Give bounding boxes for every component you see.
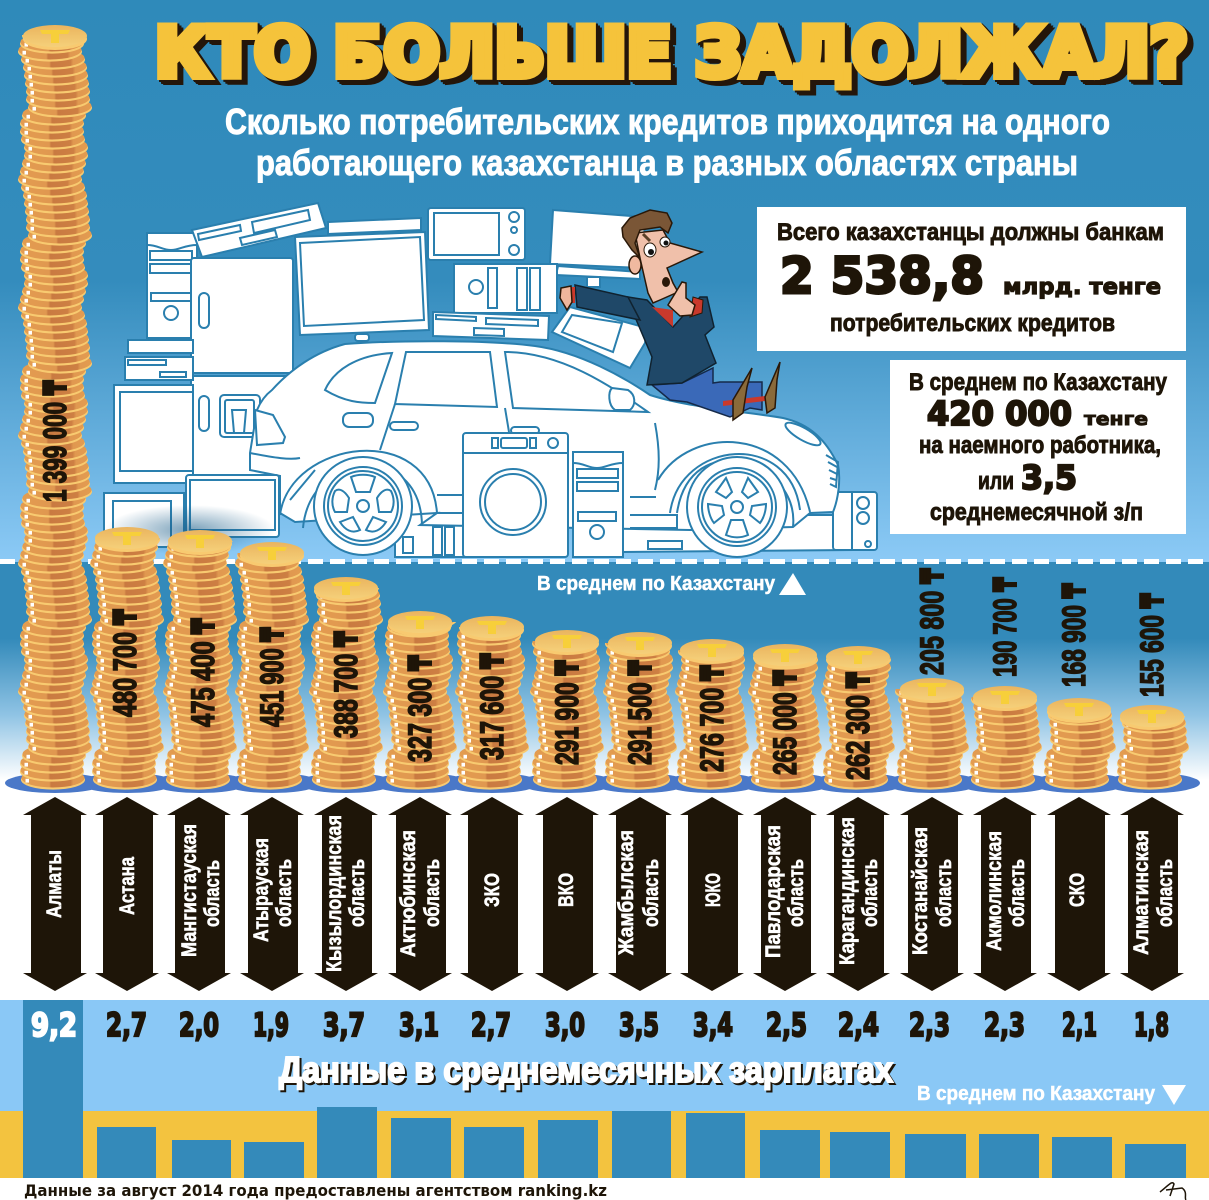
appliance: monitor bottom left [104,493,184,547]
car windows [325,352,648,412]
stack: Актюбинская [383,611,457,790]
box: total debt [757,207,1186,351]
arrow: ЗКО: ЗКО [481,873,504,907]
stack: Алматинская [1117,592,1189,790]
appliance: microwave top [428,208,525,260]
arrow: Алматы [23,797,87,991]
bar chart: monthly salaries [23,1000,1186,1178]
arrow: Актюбинская [388,797,452,991]
salary values: 2,5 [766,1006,807,1044]
stack: Костанайская [895,568,969,790]
box: total debt: млрд. тенге [1003,275,1161,300]
salary values: 3,5 [619,1006,659,1044]
stack: Атырауская [235,542,309,790]
man: left hand [560,286,572,310]
arrow: Актюбинская: область [421,859,444,927]
box: national average: среднемесячной з/п [930,499,1143,526]
stack: Карагандинская [821,646,895,790]
box: national average: или [978,468,1014,495]
arrow: ЮКО [680,797,744,991]
arrow: Карагандинская [826,797,890,991]
salary values: 1,9 [253,1006,289,1044]
salary values: 2,1 [1062,1006,1097,1044]
arrow: Костанайская [900,797,964,991]
title: КТО БОЛЬШЕ ЗАДОЛЖАЛ? [155,14,1188,93]
appliance: fridge [191,258,293,476]
arrow: Акмолинская: область [1006,859,1029,927]
arrow: Астана [95,797,159,991]
man sitting on the car [560,210,780,420]
box: national average [890,360,1186,534]
stack: Кызылординская: 388 700 ₸ [328,631,364,738]
arrow: Павлодарская: Павлодарская [762,825,785,958]
coin stacks chart [18,0,1189,790]
box: national average: В среднем по Казахстану [909,369,1168,396]
stack: Мангистауская [163,530,237,790]
arrow: Алматинская: область [1154,859,1177,927]
arrow: Актюбинская: Актюбинская [397,830,420,957]
rear wheel [314,457,412,555]
appliance: DVD under tower [433,312,549,340]
man: mouth [662,277,670,287]
stack: ВКО [530,630,604,790]
arrow: СКО: СКО [1066,873,1089,907]
salary values [31,1006,1169,1044]
arrow: Карагандинская: Карагандинская [836,817,859,965]
arrow: Костанайская: Костанайская [909,827,932,955]
arrow: Жамбылская: область [640,859,663,927]
stack: Алматы: 1 399 000 ₸ [37,380,73,502]
salary values: 3,4 [693,1006,733,1044]
box: total debt: Всего казахстанцы должны банкам [777,219,1164,246]
washing machine [463,433,568,557]
stack: Алматы [18,0,92,790]
region arrows [23,797,1184,991]
arrow: СКО [1047,797,1111,991]
stack: СКО [1044,582,1116,790]
arrow: Жамбылская: Жамбылская [615,830,638,956]
arrow: ЮКО: ЮКО [702,873,725,907]
car [250,341,839,530]
stack: ЗКО: 317 600 ₸ [474,653,510,760]
source note: Данные за август 2014 года предоставлены агентством ranking.kz [24,1181,607,1200]
salary values: 1,8 [1134,1006,1169,1044]
arrow: Мангистауская: область [201,860,224,927]
salary values: 2,3 [984,1006,1025,1044]
car door handles [390,422,539,434]
arrow: ЗКО [460,797,524,991]
stack: Кызылординская [309,577,383,790]
salary values: 3,0 [545,1006,585,1044]
background: lower fade to white [0,562,1209,780]
stack: Жамбылская: 291 500 ₸ [622,660,658,765]
stack: Акмолинская [970,576,1042,790]
shadow behind first coin tops [105,505,275,555]
appliance: tilted microwave [552,307,647,368]
appliance: horizontal tower [454,264,557,313]
arrow: ВКО: ВКО [555,873,578,907]
arrow: Акмолинская: Акмолинская [983,831,1006,951]
monitor in front of car [186,475,279,537]
man: eyes [643,234,670,257]
appliance: monitor left [114,385,193,483]
stack: Атырауская: 451 900 ₸ [254,627,290,727]
arrow: Алматинская: Алматинская [1130,830,1153,955]
average marker above: В среднем по Казахстану [537,573,776,595]
appliance: tower left [147,233,197,338]
man: legs [652,368,762,417]
salary values: 2,4 [838,1006,879,1044]
man: cuff [571,287,575,303]
stack: ЮКО: 276 700 ₸ [694,665,730,772]
arrow: Атырауская: Атырауская [250,838,273,942]
stack: Алматинская: 155 600 ₸ [1134,593,1170,697]
stack: Мангистауская: 475 400 ₸ [185,618,221,727]
salary band background [0,1000,1209,1111]
salary values: 9,2 [31,1006,77,1044]
arrow: Костанайская: область [933,859,956,927]
subtitle [225,101,1110,183]
man: socks [723,396,765,406]
stack: СКО: 168 900 ₸ [1056,583,1092,687]
stack: ЮКО [675,639,749,790]
arrow: Атырауская: область [273,859,296,927]
car rear light [255,410,285,445]
salary values: 2,7 [471,1006,511,1044]
stack: Жамбылская [603,632,677,790]
arrow: Кызылординская: область [346,859,369,927]
arrow: Алматинская [1120,797,1184,991]
average marker below: В среднем по Казахстану [917,1083,1156,1105]
computer tower [573,452,623,557]
dashed average line [0,559,1209,564]
stack: Актюбинская: 327 300 ₸ [402,655,438,762]
man: arm [575,285,640,320]
salary values: 3,1 [399,1006,439,1044]
background: upper blue gradient [0,0,1209,562]
stack: Павлодарская [748,644,822,790]
box: national average: 420 000 [927,394,1072,433]
arrow: Павлодарская [753,797,817,991]
box: national average: на наемного работника, [919,432,1161,459]
car headlight and grille [783,419,838,487]
stack: Костанайская: 205 800 ₸ [914,568,950,675]
arrow: Павлодарская: область [785,859,808,927]
man: hair [622,210,672,258]
artist signature [1160,1183,1186,1200]
stack: Акмолинская: 190 700 ₸ [987,577,1023,677]
arrow: Мангистауская: Мангистауская [178,824,201,957]
car wheel arches [280,442,810,528]
arrow: Астана: Астана [116,857,139,915]
man: shoes [733,362,780,420]
car fuel cap [343,413,373,427]
arrow: ВКО [535,797,599,991]
stack: Павлодарская: 265 000 ₸ [767,670,803,775]
arrow: Кызылординская [314,797,378,991]
stack: Астана: 480 700 ₸ [107,609,143,717]
appliance: thin DVD left [128,340,193,353]
illustration: pile of appliances [104,203,877,557]
man: cuff at chin [690,297,703,317]
man: face [635,230,702,303]
arrow: Мангистауская [167,797,231,991]
arrow: Акмолинская [973,797,1037,991]
man: ear [629,256,641,274]
base shadow under coin stacks [5,773,1200,793]
subtitle: работающего казахстанца в разных областях страны [256,142,1078,183]
salary values: 2,3 [909,1006,950,1044]
box: national average: 3,5 [1021,458,1077,497]
appliance: monitor right [550,210,645,287]
box: total debt: 2 538,8 [780,247,984,305]
heading: data in monthly salaries: Данные в среднемесячных зарплатах [279,1049,893,1090]
front wheel [687,457,787,557]
arrow: Кызылординская: Кызылординская [323,815,346,972]
appliance: DVD left [125,357,193,380]
man: jacket [628,297,716,385]
arrow: Атырауская [240,797,304,991]
appliance: tilted DVD player [192,203,326,257]
arrow: Алматы: Алматы [43,850,66,918]
stack: Астана [90,527,164,790]
appliance: thin DVD top [328,218,421,234]
stack: Карагандинская: 262 300 ₸ [840,672,876,780]
arrow: Карагандинская: область [859,859,882,927]
arrow: Жамбылская [608,797,672,991]
stack: ВКО: 291 900 ₸ [549,660,585,765]
man: hand at chin [668,282,695,316]
man: shirt [652,307,673,327]
salary values: 2,7 [106,1006,147,1044]
box: total debt: потребительских кредитов [830,310,1115,337]
car mirror [609,388,634,410]
salary values: 3,7 [323,1006,365,1044]
stack: ЗКО [455,616,529,790]
box: national average: тенге [1084,409,1148,430]
appliance: large monitor [295,232,429,341]
salary values: 2,0 [179,1006,219,1044]
appliance: low units under car [395,492,877,557]
yellow band behind bars [0,1111,1209,1178]
car door lines [250,404,677,528]
